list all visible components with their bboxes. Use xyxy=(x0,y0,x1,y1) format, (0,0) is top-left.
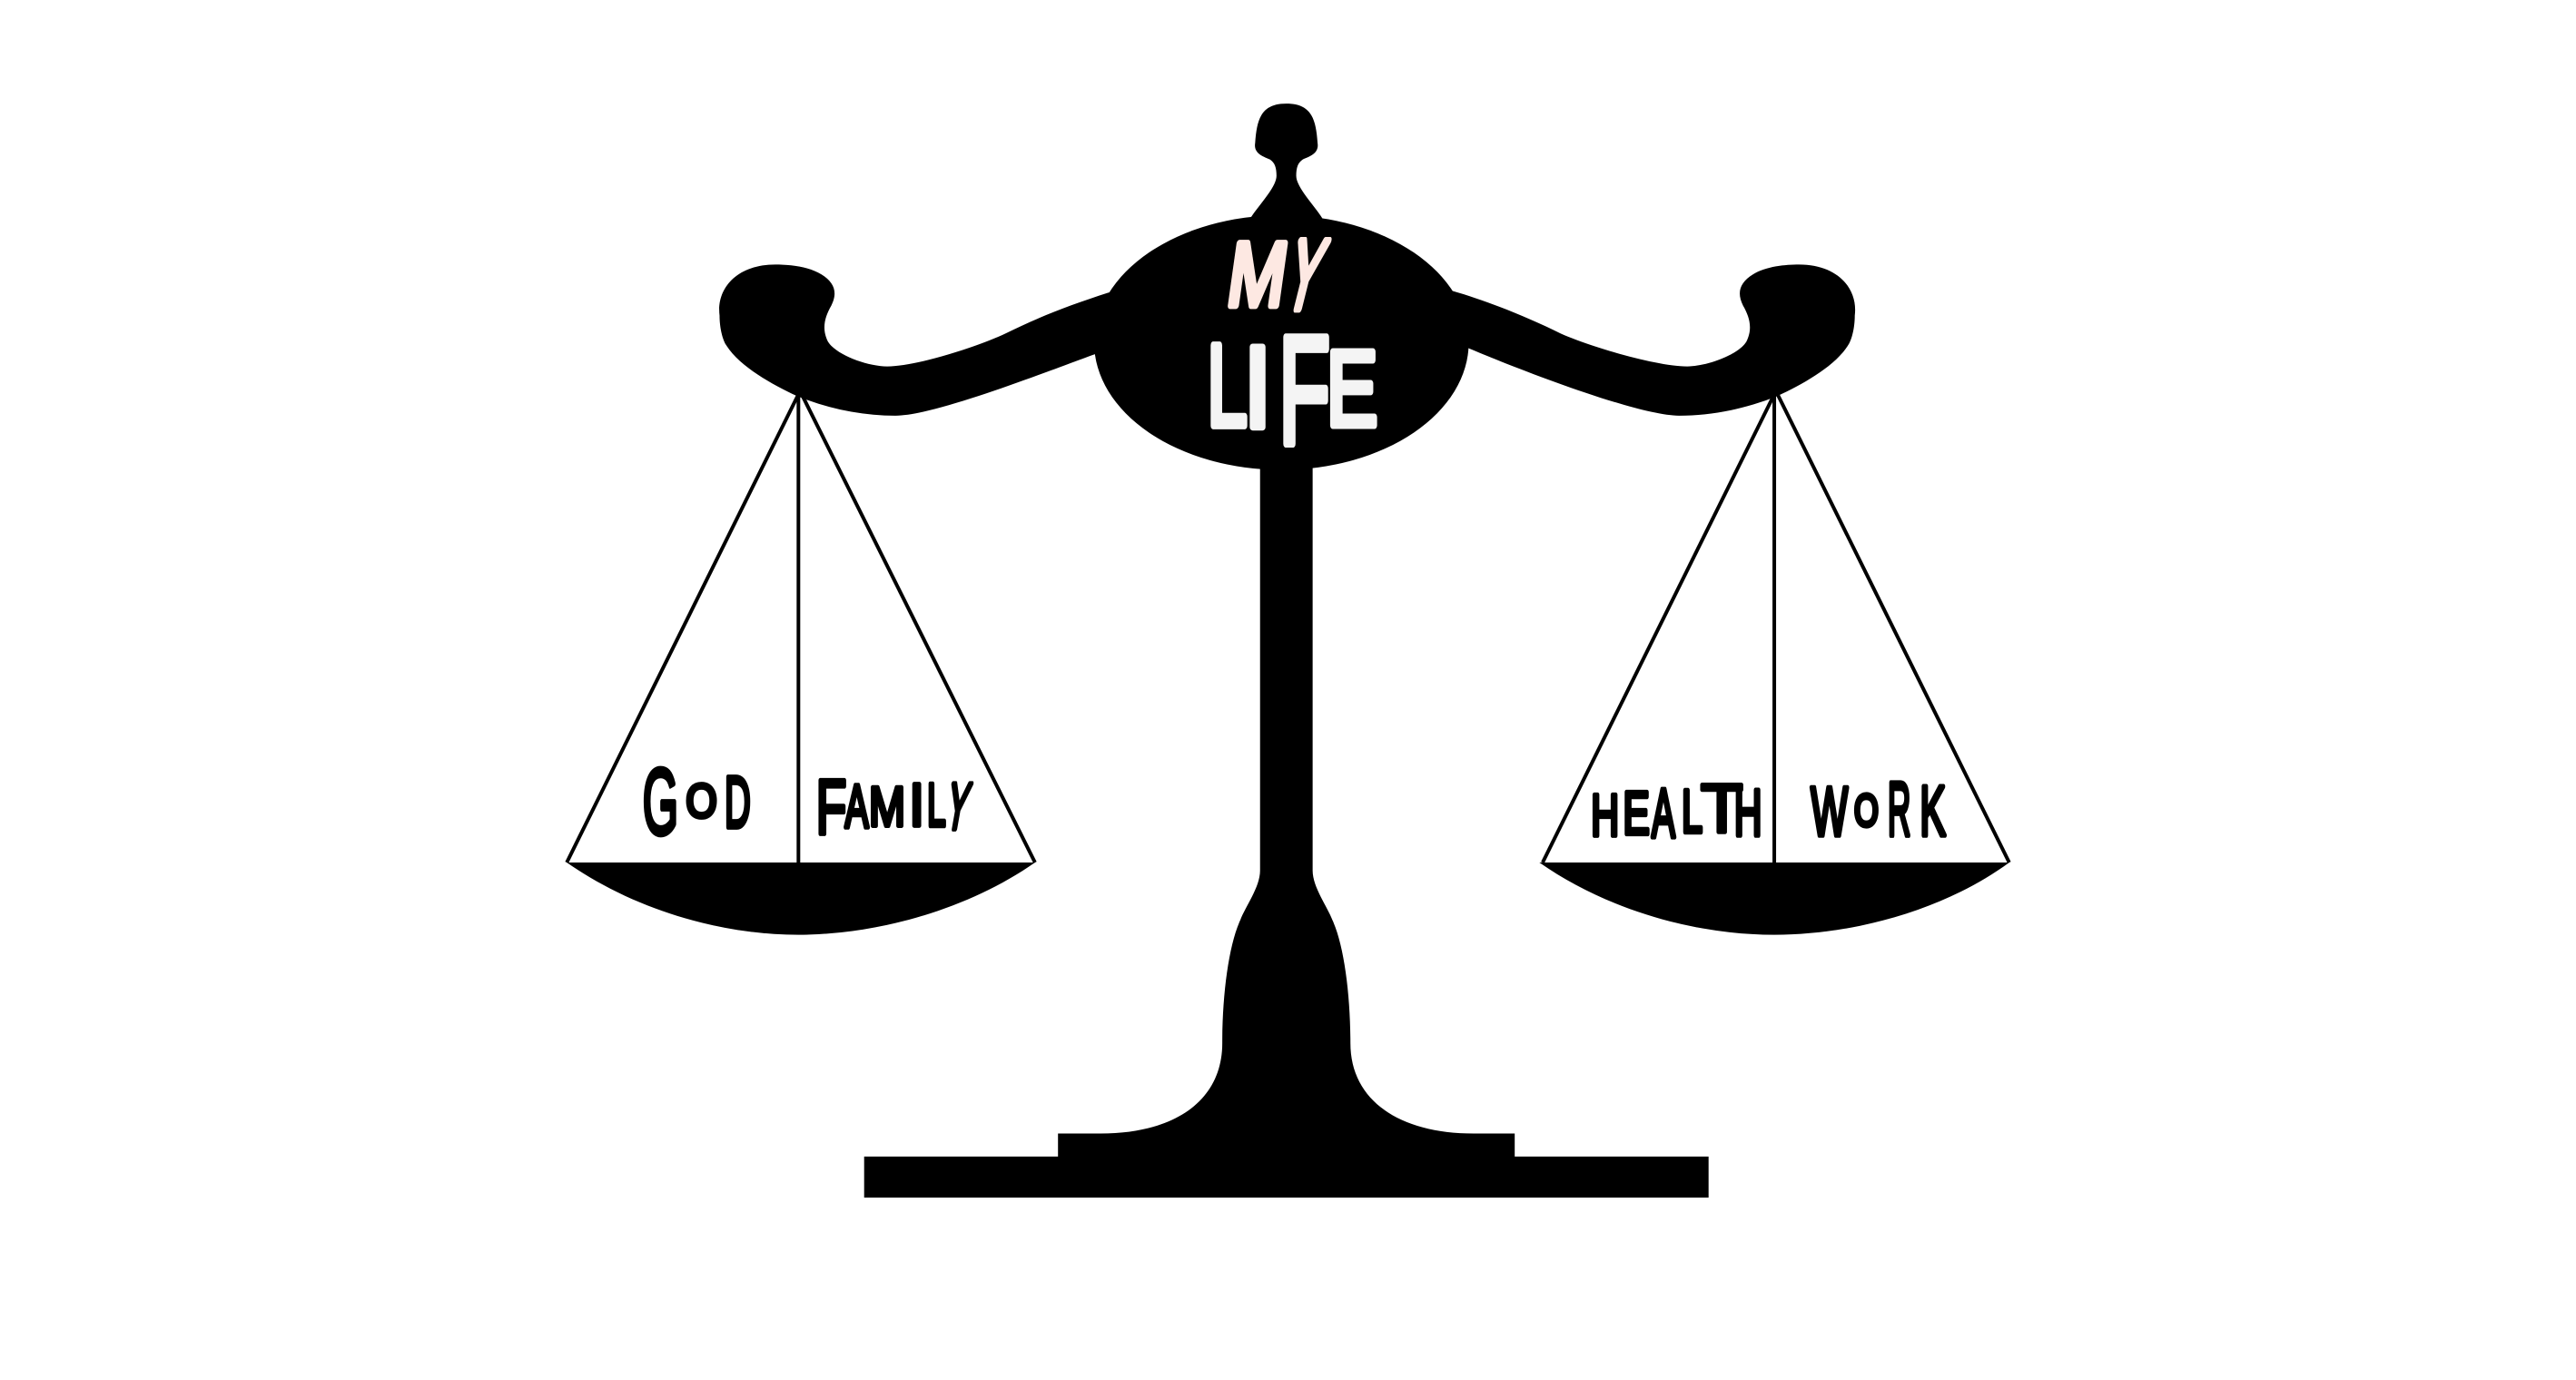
heading: MY: M xyxy=(1222,223,1294,325)
label: FAMILY: L xyxy=(927,772,946,839)
label: WORK: W xyxy=(1811,774,1849,851)
heading: MY xyxy=(1222,221,1336,330)
right arm of the beam xyxy=(1413,264,1855,416)
heading: LIFE xyxy=(1207,305,1377,478)
label: HEALTH: H xyxy=(1591,782,1619,848)
label: WORK: O xyxy=(1854,785,1879,835)
left arm of the beam xyxy=(719,264,1150,416)
stem and stepped base xyxy=(864,460,1709,1198)
label: GOD xyxy=(643,750,751,854)
central oval xyxy=(1094,215,1469,470)
label: FAMILY: I xyxy=(909,771,924,839)
label: WORK: R xyxy=(1888,766,1910,852)
label: GOD: G xyxy=(643,750,678,854)
icon: finial on top of the scale xyxy=(1250,104,1322,246)
label: GOD: O xyxy=(686,776,717,828)
heading: LIFE: L xyxy=(1207,320,1248,450)
label: GOD: D xyxy=(725,763,751,843)
label: FAMILY: A xyxy=(845,772,869,841)
label: FAMILY: F xyxy=(816,764,846,851)
left pan strings xyxy=(567,394,1035,864)
right pan xyxy=(1539,862,2009,935)
label: HEALTH: T xyxy=(1701,771,1742,848)
heading: LIFE: E xyxy=(1327,329,1377,448)
heading: LIFE: F xyxy=(1278,305,1330,478)
label: HEALTH: L xyxy=(1682,777,1703,845)
left pan xyxy=(567,862,1035,935)
label: WORK xyxy=(1811,766,1946,852)
label: HEALTH: A xyxy=(1652,774,1675,852)
heading: LIFE: I xyxy=(1243,321,1272,452)
heading: MY: Y xyxy=(1277,221,1336,330)
label: FAMILY xyxy=(816,764,975,851)
label: FAMILY: M xyxy=(869,775,905,838)
label: HEALTH: H xyxy=(1734,775,1762,850)
label: WORK: K xyxy=(1920,773,1946,851)
right pan strings xyxy=(1543,394,2009,864)
label: HEALTH xyxy=(1591,771,1762,852)
label: HEALTH: E xyxy=(1623,780,1650,848)
label: FAMILY: Y xyxy=(942,771,975,843)
